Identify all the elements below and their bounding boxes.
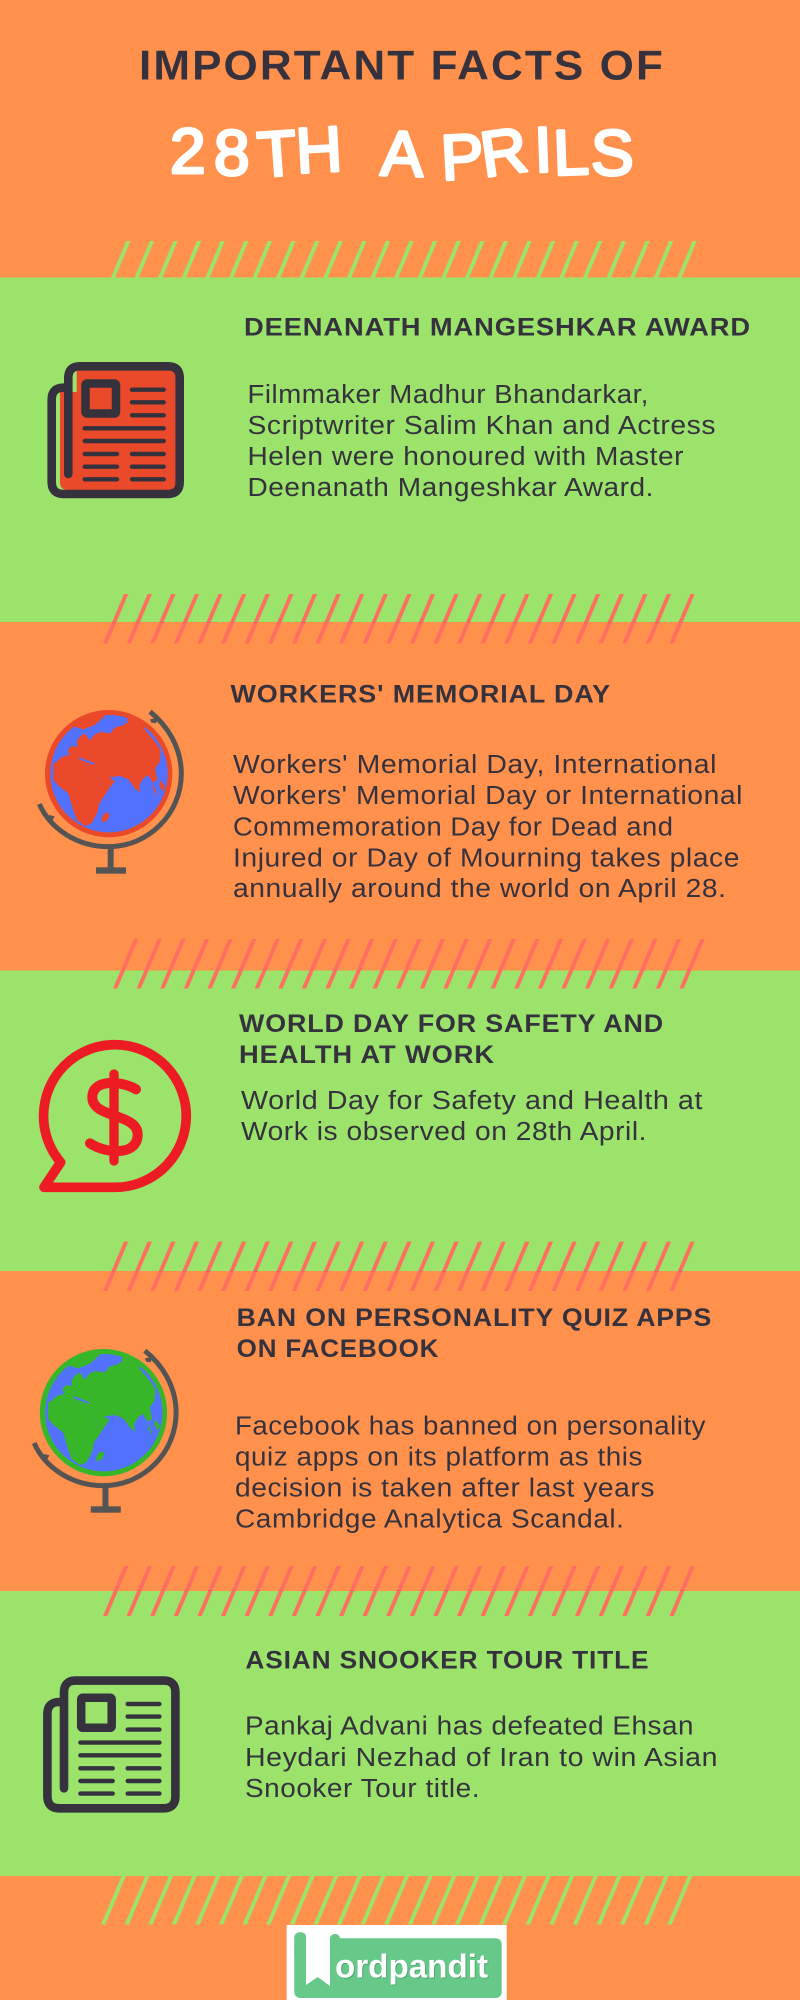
title: 28th aprils: 28TH APRILS — [170, 113, 634, 194]
text: snooker description: Pankaj Advani has defeated Ehsan — [245, 1712, 694, 1740]
text: quiz apps description: Cambridge Analytica Scandal. — [235, 1505, 624, 1533]
text: memorial day description: Commemoration Day for Dead and — [233, 813, 674, 841]
heading: world day for safety and health at work: WORLD DAY FOR SAFETY AND — [239, 1010, 664, 1038]
panel: world day for safety and health at work — [0, 970, 800, 1272]
heading: asian snooker tour title: ASIAN SNOOKER TOUR TITLE — [245, 1646, 649, 1674]
heading: ban on personality quiz apps on facebook: BAN ON PERSONALITY QUIZ APPS — [237, 1304, 712, 1332]
panel: asian snooker tour title — [0, 1591, 800, 1876]
text: quiz apps description — [235, 1412, 706, 1533]
text: memorial day description: Injured or Day of Mourning takes place — [233, 845, 740, 873]
text: snooker description: Snooker Tour title. — [245, 1775, 480, 1803]
icon: outline newspaper — [47, 1681, 175, 1808]
logo: wordpandit: ordpandit — [335, 1948, 488, 1986]
text: snooker description: Heydari Nezhad of Iran to win Asian — [245, 1744, 718, 1772]
icon: red newspaper — [52, 366, 180, 494]
text: memorial day description: Workers' Memorial Day, International — [233, 751, 717, 779]
text: award description: Helen were honoured with Master — [248, 443, 684, 471]
text: award description: Scriptwriter Salim Khan and Actress — [248, 412, 716, 440]
text: safety day description: Work is observed on 28th April. — [241, 1118, 647, 1146]
text: memorial day description — [233, 751, 743, 903]
text: memorial day description: annually around the world on April 28. — [233, 875, 726, 903]
heading: ban on personality quiz apps on facebook: ON FACEBOOK — [237, 1335, 439, 1363]
text: safety day description: World Day for Safety and Health at — [241, 1087, 703, 1115]
panel: header — [0, 0, 800, 278]
heading: workers' memorial day: WORKERS' MEMORIAL DAY — [230, 680, 611, 708]
heading: ban on personality quiz apps on facebook — [237, 1304, 712, 1363]
icon: green and blue globe — [34, 1349, 176, 1513]
text: snooker description — [245, 1712, 718, 1803]
icon: red and blue globe — [39, 710, 181, 874]
icon: dollar speech bubble — [44, 1045, 186, 1187]
text: award description — [248, 381, 716, 502]
text: quiz apps description: Facebook has banned on personality — [235, 1412, 706, 1440]
heading: deenanath mangeshkar award: DEENANATH MANGESHKAR AWARD — [244, 314, 751, 342]
text: safety day description — [241, 1087, 703, 1146]
panel: workers' memorial day — [0, 622, 800, 971]
text: quiz apps description: decision is taken after last years — [235, 1474, 655, 1502]
text: memorial day description: Workers' Memorial Day or International — [233, 782, 743, 810]
panel: ban on personality quiz apps — [0, 1271, 800, 1591]
text: quiz apps description: quiz apps on its platform as this — [235, 1443, 643, 1471]
text: award description: Deenanath Mangeshkar Award. — [248, 474, 654, 502]
panel: deenanath mangeshkar award — [0, 278, 800, 622]
heading: world day for safety and health at work: HEALTH AT WORK — [239, 1041, 495, 1069]
text: award description: Filmmaker Madhur Bhandarkar, — [248, 381, 649, 409]
heading: world day for safety and health at work — [239, 1010, 664, 1069]
logo: wordpandit — [287, 1925, 507, 2000]
title: important facts of: IMPORTANT FACTS OF — [139, 42, 665, 88]
